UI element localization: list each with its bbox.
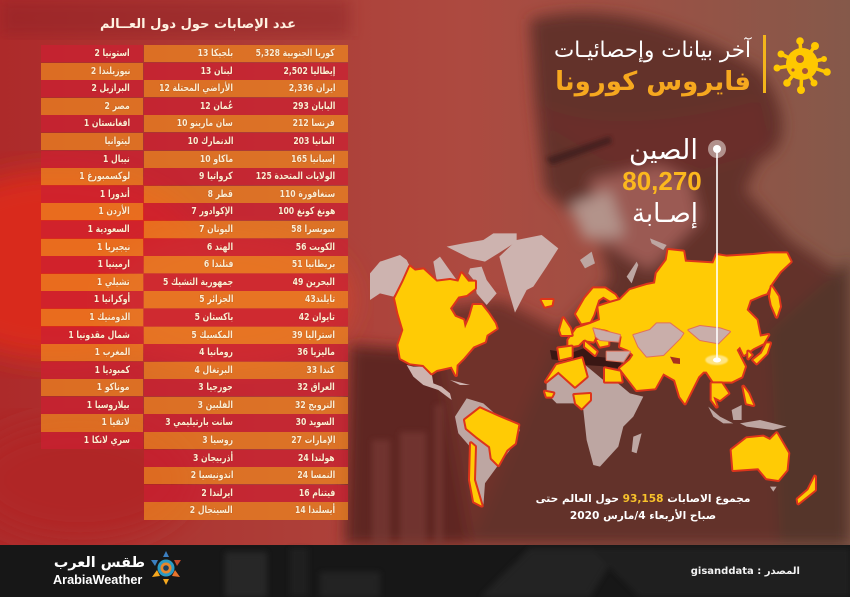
- table column 1: سويسرا 58: [291, 224, 335, 235]
- map: Eurasia and north Africa: [542, 250, 791, 408]
- table column 1: الإمارات 27: [291, 435, 335, 446]
- table column 3: افغانستان 1: [84, 118, 130, 129]
- table column 1: هونغ كونغ 100: [278, 206, 335, 217]
- label: cases: إصـابة: [632, 199, 698, 229]
- table column 1: هولندا 24: [298, 453, 335, 464]
- table column 2: الأراضي المحتلة 12: [159, 83, 233, 94]
- table column 1: سنغافورة 110: [279, 189, 335, 200]
- table column 2: عُمان 12: [200, 101, 233, 112]
- table column 2: جمهورية التشيك 5: [163, 277, 233, 288]
- table column 1: المانيا 203: [294, 136, 335, 147]
- table column 3: شمال مقدونيا 1: [68, 330, 130, 340]
- table column 2: روسيا 3: [202, 435, 233, 446]
- table column 3: المغرب 1: [94, 347, 130, 358]
- table column 3: نيبال 1: [103, 154, 130, 165]
- table column 2: سانت بارتيليمي 3: [165, 417, 233, 428]
- table column 1: الولايات المتحدة 125: [256, 171, 335, 182]
- table column 1: أيسلندا 14: [295, 505, 335, 516]
- text: total cases worldwide: مجموع الاصابات 93,158 حول العالم حتى: [536, 493, 750, 505]
- title: latest data and statistics: آخر بيانات وإحصائيـات: [554, 38, 751, 63]
- table column 3: مصر 2: [105, 101, 130, 112]
- table column 1: اليابان 293: [292, 101, 335, 112]
- table column 2: سان مارينو 10: [177, 118, 233, 129]
- table column 1: ماليزيا 36: [297, 347, 335, 358]
- table column 2: الإكوادور 7: [191, 206, 233, 217]
- table column 1: كوريا الجنوبية 5,328: [256, 48, 335, 59]
- map: yellow americas and oceania: [465, 408, 815, 506]
- number: China cases: 80,270: [622, 166, 702, 196]
- table column 3: ليتوانيا: [104, 136, 130, 147]
- table column 2: البرتغال 4: [195, 365, 233, 376]
- table column 1: [246, 45, 348, 520]
- table column 3: كمبوديا 1: [95, 365, 130, 376]
- text: total cases worldwide: [536, 493, 750, 522]
- table column 3: سري لانكا 1: [84, 435, 130, 446]
- table column 1: إيطاليا 2,502: [283, 66, 335, 77]
- map: gray land south: [455, 238, 787, 507]
- table column 1: تايوان 42: [299, 312, 335, 323]
- table column 3: البرازيل 2: [92, 83, 130, 94]
- table column 2: لبنان 13: [201, 66, 233, 77]
- map: Afghanistan: [670, 357, 680, 364]
- heading divider: [763, 35, 766, 93]
- table column 3: السعودية 1: [88, 224, 130, 235]
- table column 1: بريطانيا 51: [292, 259, 335, 270]
- icon: sun and swirl: [151, 551, 181, 585]
- table column 3: لوكسمبورغ 1: [79, 171, 130, 182]
- table column 3: ارمينيا 1: [98, 259, 130, 270]
- table column 2: ماكاو 10: [200, 154, 233, 165]
- table column 1: كندا 33: [307, 365, 335, 376]
- table column 2: ايرلندا 2: [202, 488, 233, 499]
- table column 1: تايلند43: [305, 294, 335, 305]
- table column 2: بلجيكا 13: [197, 48, 233, 59]
- table column 1: النرويج 32: [295, 400, 335, 411]
- table column 2: الجزائر 5: [199, 294, 233, 305]
- table column 1: ايران 2,336: [288, 83, 335, 94]
- table column 1: النمسا 24: [297, 470, 335, 481]
- table column 3: بيلاروسيا 1: [87, 400, 130, 411]
- source: المصدر : gisanddata: [691, 566, 800, 577]
- table column 3: تشيلي 1: [97, 277, 130, 288]
- table column 3: موناكو 1: [97, 382, 130, 393]
- table column 2: [144, 45, 246, 520]
- title: coronavirus: فايروس كورونا: [555, 67, 751, 97]
- table column 2: كرواتيا 9: [199, 171, 233, 182]
- table column 2: قطر 8: [208, 189, 233, 200]
- table column 2: المكسيك 5: [192, 330, 233, 340]
- table column 1: الكويت 56: [296, 242, 335, 253]
- logo text: Arabic name: طقس العرب: [54, 555, 145, 571]
- table column 1: العراق 32: [297, 382, 335, 393]
- map: gray land north america: [370, 233, 558, 400]
- table column 3: الدومنيك 1: [89, 312, 130, 323]
- table column 3: [41, 45, 143, 449]
- table column 3: استونيا 2: [95, 48, 130, 59]
- table column 3: نيجيريا 1: [97, 242, 130, 253]
- table column 1: فيتنام 16: [299, 488, 335, 499]
- table column 2: الهند 6: [207, 242, 233, 253]
- table column 2: جورجيا 3: [199, 382, 233, 393]
- table column 3: الأردن 1: [99, 206, 130, 217]
- table column 1: السويد 30: [296, 417, 335, 428]
- table column 3: أوكرانيا 1: [94, 294, 130, 305]
- label: China: الصين: [629, 134, 698, 166]
- table column 2: الفلبين 3: [198, 400, 233, 411]
- pin line: China: [708, 140, 726, 362]
- icon: China marker glow: [705, 355, 728, 365]
- table column 3: لاتفيا 1: [102, 417, 130, 428]
- map: yellow north america: [395, 267, 497, 375]
- title: cases table heading: عدد الإصابات حول دول العــالم: [100, 17, 296, 32]
- logo text: Latin name: ArabiaWeather: [53, 573, 142, 587]
- table column 1: البحرين 49: [293, 277, 335, 288]
- table column 1: استراليا 39: [292, 330, 335, 340]
- table column 2: الدنمارك 10: [187, 136, 233, 147]
- table column 3: نيوزيلندا 2: [90, 66, 130, 77]
- table column 2: اليونان 7: [199, 224, 233, 235]
- table column 1: إسبانيا 165: [291, 154, 335, 165]
- table column 2: السينجال 2: [190, 505, 233, 516]
- table column 2: فنلندا 6: [203, 259, 233, 270]
- table column 3: أندورا 1: [100, 189, 130, 200]
- table column 2: اندونيسيا 2: [190, 470, 233, 481]
- table column 1: فرنسا 212: [293, 118, 335, 129]
- map: gray interior countries: [593, 323, 730, 362]
- table column 2: رومانيا 4: [199, 347, 233, 358]
- table column 2: أذربيجان 3: [193, 453, 233, 464]
- table column 2: باكستان 5: [194, 312, 233, 323]
- panel: cases by country table: [41, 45, 348, 520]
- logo: ArabiaWeather: [53, 551, 181, 587]
- text: total cases worldwide: صباح الأربعاء 4/مارس 2020: [570, 510, 716, 522]
